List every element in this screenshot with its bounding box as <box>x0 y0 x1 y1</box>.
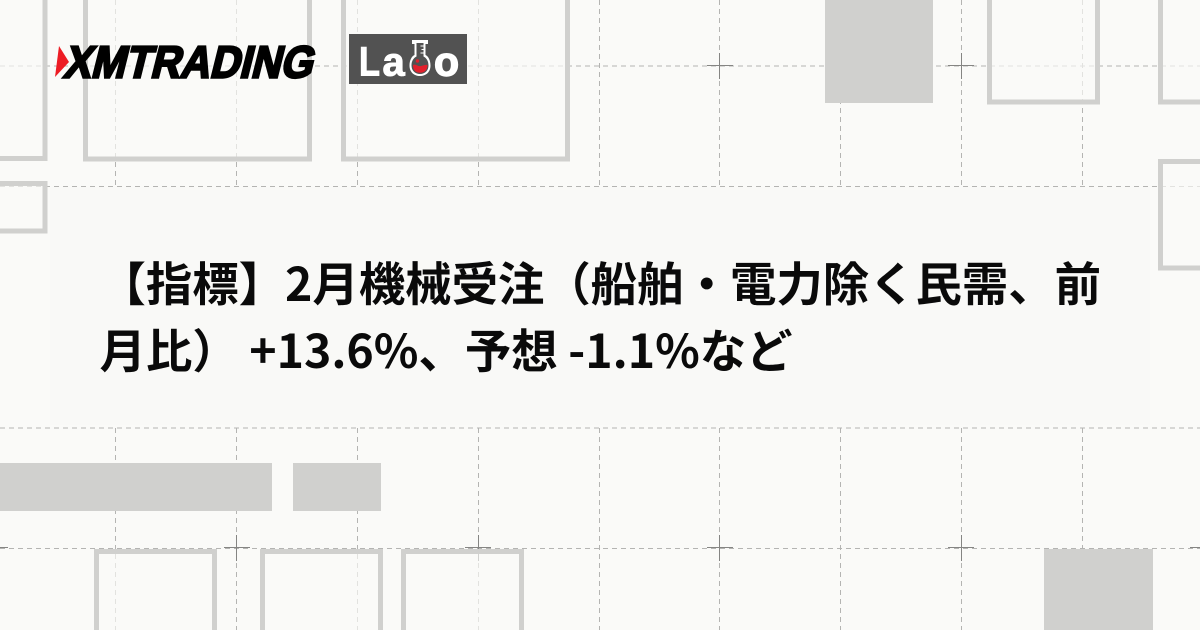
title: 月比） +13.6%、予想 -1.1%など <box>100 315 793 382</box>
Lab logo: L <box>359 38 380 84</box>
Lab logo <box>349 34 467 84</box>
title <box>100 248 1101 382</box>
icon: red arrow mark <box>55 46 69 77</box>
title: 【指標】2月機械受注（船舶・電力除く民需、前 <box>100 248 1101 315</box>
Lab logo: a <box>382 40 406 84</box>
Lab logo: o <box>434 38 459 84</box>
XMTRADING logo <box>55 40 322 82</box>
icon: flask <box>410 40 430 76</box>
